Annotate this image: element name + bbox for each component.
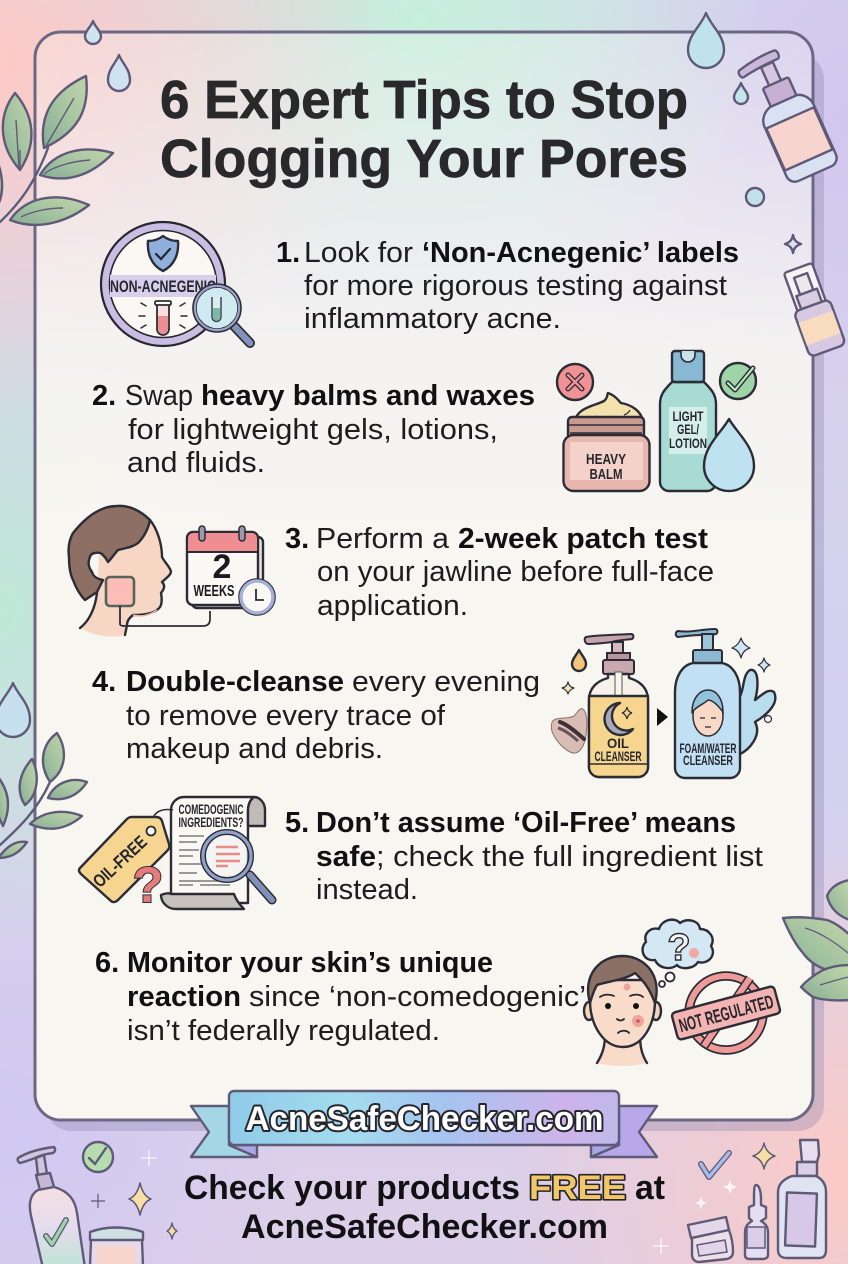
icon: patch test head and calendar <box>68 506 275 637</box>
icon: cross badge <box>557 364 593 400</box>
icon: water drop <box>704 419 754 491</box>
icon: calendar: 2 <box>213 548 231 586</box>
icon: gel bottle: LIGHT <box>672 408 704 424</box>
icon: worried face <box>584 956 661 1066</box>
icon: balm jar: BALM <box>590 466 622 483</box>
tip 4 text: 4. <box>92 666 116 698</box>
tip 3 text: on your jawline before full-face <box>317 556 714 588</box>
arrow <box>657 708 668 726</box>
call to action: at <box>635 1169 665 1207</box>
tip 2 text: and fluids. <box>127 447 265 479</box>
tip 5 text: Don’t assume ‘Oil-Free’ means <box>316 807 736 839</box>
icon: eye makeup smudge <box>551 709 587 753</box>
decoration: top-right pump bottle <box>736 45 840 185</box>
icon: oil cleanser bottle: OIL <box>607 735 629 751</box>
icon: thought bubble: ? <box>667 927 691 969</box>
icon: prohibition stamp: NOT REGULATED <box>677 992 776 1037</box>
tip 1 text: ‘Non-Acnegenic’ labels <box>422 237 739 269</box>
icon: calendar <box>187 526 263 608</box>
tip 4 text: Double-cleanse <box>126 666 344 698</box>
tip 5 text: safe <box>316 841 376 873</box>
icon: oil-free tag: OIL-FREE <box>89 832 151 891</box>
icon: oil-free tag and ingredient scroll <box>79 797 272 913</box>
icon: concerned face and not regulated stamp <box>584 920 781 1066</box>
tip 5 text <box>285 807 763 906</box>
icon: gel bottle <box>660 351 716 491</box>
call to action: AcneSafeChecker.com <box>241 1208 608 1246</box>
tip 2 text <box>92 380 535 479</box>
tip 4 text <box>92 666 540 765</box>
icon: double cleanse bottles <box>551 629 775 778</box>
tip 4 text: makeup and debris. <box>126 733 383 765</box>
icon: head profile <box>68 506 171 637</box>
call to action <box>184 1169 665 1246</box>
tip 6 text: isn’t federally regulated. <box>127 1015 440 1047</box>
call to action: Check your products <box>184 1169 520 1207</box>
tip 3 text: 3. <box>285 523 309 555</box>
tip 2 text: heavy balms and waxes <box>201 380 535 412</box>
icon: oil drop <box>572 650 586 671</box>
ribbon banner <box>191 1091 657 1157</box>
ribbon banner: AcneSafeChecker.com <box>246 1100 604 1138</box>
tip 6 text: since ‘non-comedogenic’ <box>249 981 586 1013</box>
decoration: top-left leaves <box>0 76 113 225</box>
icon: non-acnegenic seal <box>101 222 250 346</box>
title: 6 Expert Tips to Stop <box>160 70 688 130</box>
tip 3 text: application. <box>317 590 468 622</box>
tip 5 text: ; check the full ingredient list <box>376 841 763 873</box>
icon: sparkles <box>562 638 770 694</box>
icon: oil-free tag: ? <box>133 857 163 913</box>
title <box>160 70 688 189</box>
decoration: bottom-right bottles <box>653 1140 826 1262</box>
tip 1 text: 1. <box>276 237 300 269</box>
tip 1 text: for more rigorous testing against <box>304 270 727 302</box>
tip 6 text: Monitor your skin’s unique <box>127 947 493 979</box>
call to action: FREE <box>529 1169 626 1207</box>
tip 6 text: reaction <box>127 981 241 1013</box>
decoration: right leaves <box>783 880 848 1000</box>
decoration: water drops and bubble <box>0 13 801 737</box>
icon: gel bottle: GEL/ <box>677 421 699 437</box>
icon: test patch <box>106 577 134 606</box>
icon: balm jar <box>564 393 650 491</box>
tip 2 text: 2. <box>92 380 116 412</box>
icon: check badge <box>720 363 756 399</box>
tip 4 text: every evening <box>352 666 540 698</box>
tip 3 text: 2-week patch test <box>458 523 708 555</box>
tip 2 text: for lightweight gels, lotions, <box>128 414 498 446</box>
tip 4 text: to remove every trace of <box>126 700 446 732</box>
tip 5 text: instead. <box>316 874 418 906</box>
tip 1 text <box>276 237 739 335</box>
icon: oil cleanser bottle: CLEANSER <box>594 748 642 764</box>
tip 6 text: 6. <box>95 947 119 979</box>
icon: prohibition stamp <box>671 976 781 1050</box>
icon: magnifying glass <box>203 832 272 900</box>
tip 3 text: Perform a <box>316 523 450 555</box>
icon: ingredient scroll: INGREDIENTS? <box>178 814 244 830</box>
icon: foam cleanser bottle <box>675 629 740 778</box>
decoration: bottom-left bottle and jar <box>18 1142 177 1264</box>
icon: gel bottle: LOTION <box>669 435 707 451</box>
tip 6 text <box>95 947 586 1047</box>
tip 1 text: Look for <box>304 237 413 269</box>
icon: heavy balm versus light gel <box>557 351 756 491</box>
title: Clogging Your Pores <box>160 129 688 189</box>
icon: thought bubble <box>643 920 713 987</box>
tip 3 text <box>285 523 714 622</box>
tip 2 text: Swap <box>125 380 193 412</box>
icon: ingredient scroll <box>161 797 265 909</box>
icon: oil cleanser bottle <box>585 634 648 777</box>
icon: non-acnegenic seal: NON-ACNEGENIC <box>110 277 216 296</box>
icon: clock <box>239 579 275 615</box>
icon: splash <box>738 670 775 755</box>
icon: calendar: WEEKS <box>194 583 235 600</box>
icon: foam cleanser bottle: CLEANSER <box>683 752 733 768</box>
icon: balm jar: HEAVY <box>586 451 626 468</box>
decoration: right small bottle <box>780 261 846 357</box>
icon: foam cleanser bottle: FOAM/WATER <box>680 740 736 756</box>
decoration: mid-left leaves <box>0 733 87 858</box>
tip 1 text: inflammatory acne. <box>304 303 561 335</box>
tip 5 text: 5. <box>285 807 309 839</box>
icon: ingredient scroll: COMEDOGENIC <box>178 801 244 817</box>
icon: oil-free tag <box>79 810 173 913</box>
